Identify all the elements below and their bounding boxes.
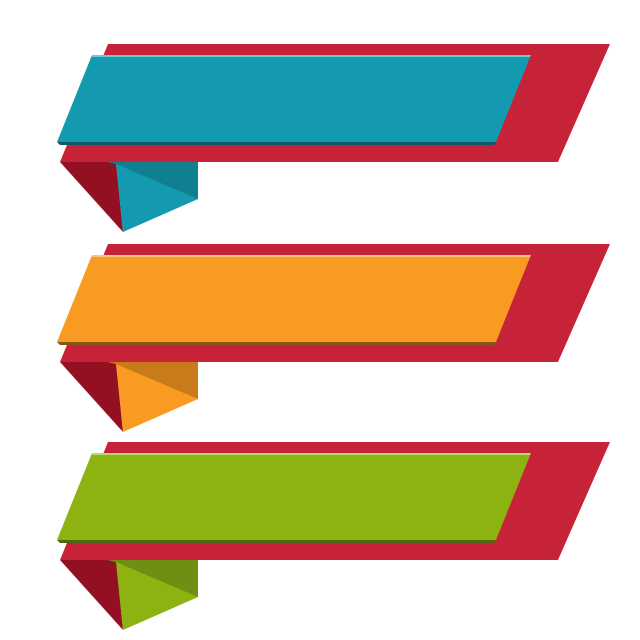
- banner: teal: [57, 44, 610, 232]
- banner: orange: [57, 244, 610, 432]
- fold: green: [108, 560, 198, 630]
- banner: green: [57, 442, 610, 630]
- fold: teal: [108, 162, 198, 232]
- fold: orange: [108, 362, 198, 432]
